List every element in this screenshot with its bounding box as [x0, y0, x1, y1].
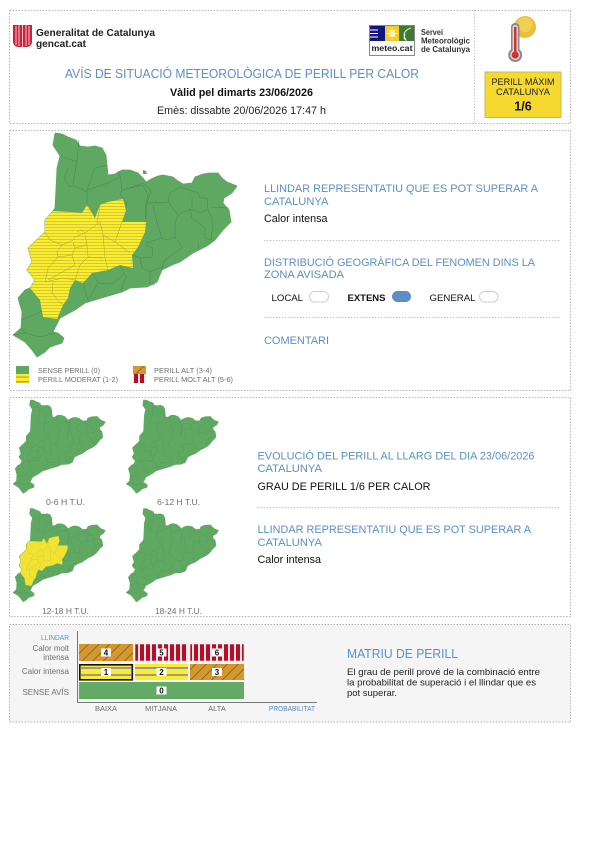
panel: danger matrix [10, 624, 570, 722]
logo text: Servei Meteorològic: de Catalunya [421, 45, 471, 54]
cell 3: 3 [215, 668, 220, 677]
badge: maximum danger: 1/6 [514, 100, 532, 114]
heading: evolution [258, 450, 534, 475]
heading: evolution: CATALUNYA [258, 463, 323, 475]
logo text: Servei Meteorològic: Meteorològic [421, 36, 471, 46]
cell 1 [80, 665, 132, 680]
map: 0-6 h [13, 400, 105, 493]
map: Catalonia danger map [13, 133, 237, 357]
chart: risk matrix [22, 631, 317, 713]
badge: maximum danger: CATALUNYA [496, 87, 551, 98]
logo text: Generalitat: Generalitat de Catalunya [36, 27, 155, 39]
label: 12-18 h: 12-18 H T.U. [42, 606, 89, 616]
cell 0 [79, 682, 244, 699]
cell 4 [79, 644, 133, 661]
matrix explanation: la probabilitat de superació i el llindar que es [347, 678, 536, 688]
danger degree: GRAU DE PERILL 1/6 PER CALOR [258, 481, 431, 493]
panel: main map and details [10, 130, 570, 390]
map legend: PERILL ALT (3-4) [154, 366, 212, 375]
distribution selector: EXTENS [348, 293, 386, 304]
cell 6 [190, 644, 244, 661]
heading: threshold: LLINDAR REPRESENTATIU QUE ES POT SUPERAR A [258, 524, 532, 536]
logo: meteo.cat [370, 26, 414, 56]
label: 6-12 h: 6-12 H T.U. [157, 497, 200, 507]
badge: maximum danger [485, 72, 561, 118]
panel: daily evolution [10, 398, 570, 616]
map: 18-24 h [126, 508, 218, 602]
map legend: SENSE PERILL (0) [38, 366, 100, 375]
row labels: SENSE AVÍS [22, 688, 69, 697]
row labels: Calor molt [33, 644, 70, 653]
map: 6-12 h [126, 400, 218, 493]
heading: threshold [264, 183, 539, 208]
cell 3 [190, 664, 244, 680]
map legend [16, 366, 233, 384]
cell 5: 5 [159, 648, 164, 658]
heading: matrix: MATRIU DE PERILL [347, 647, 458, 661]
distribution selector: GENERAL [430, 293, 476, 304]
probability labels: MITJANA [145, 704, 177, 713]
distribution selector [272, 291, 498, 304]
logo: meteo.cat: meteo.cat [372, 43, 413, 53]
heading: threshold [258, 524, 532, 549]
title: AVÍS DE SITUACIÓ METEOROLÒGICA DE PERILL PER CALOR [65, 66, 419, 81]
heading: threshold: LLINDAR REPRESENTATIU QUE ES POT SUPERAR A [264, 183, 539, 195]
label: 0-6 h: 0-6 H T.U. [46, 497, 85, 507]
map legend: PERILL MOLT ALT (5-6) [154, 375, 233, 384]
heading: geographic distribution: ZONA AVISADA [264, 269, 345, 281]
axis label: probability: PROBABILITAT [269, 704, 315, 713]
logo text: Generalitat: gencat.cat [36, 38, 86, 50]
matrix explanation [347, 667, 540, 699]
icon: Generalitat shield [13, 25, 32, 47]
heading: geographic distribution: DISTRIBUCIÓ GEOGRÀFICA DEL FENOMEN DINS LA [264, 256, 536, 269]
probability labels: BAIXA [95, 704, 117, 713]
cell 6: 6 [215, 648, 220, 658]
axis label: threshold: LLINDAR [41, 633, 70, 642]
probability labels [95, 704, 226, 713]
cell 5 [135, 644, 188, 661]
issue date: Emès: dissabte 20/06/2026 17:47 h [157, 105, 326, 117]
logo text: Generalitat [36, 27, 155, 50]
matrix explanation: El grau de perill prové de la combinació entre [347, 667, 540, 678]
panel: header [10, 10, 570, 124]
heading: threshold: CATALUNYA [264, 196, 329, 208]
matrix explanation: pot superar. [347, 688, 397, 699]
cell 2 [135, 664, 188, 680]
badge: maximum danger: PERILL MÀXIM [492, 77, 555, 88]
heading: evolution: EVOLUCIÓ DEL PERILL AL LLARG DEL DIA 23/06/2026 [258, 450, 534, 462]
row labels [22, 644, 70, 697]
cell 4: 4 [104, 648, 109, 658]
probability labels: ALTA [208, 704, 226, 713]
heading: comment: COMENTARI [264, 335, 329, 347]
row labels: intensa [43, 653, 70, 662]
threshold value: Calor intensa [258, 554, 322, 566]
map legend: PERILL MODERAT (1-2) [38, 375, 118, 384]
cell 0: 0 [159, 686, 164, 696]
row labels: Calor intensa [22, 667, 70, 676]
cell 2: 2 [159, 668, 164, 677]
map: 12-18 h [13, 508, 105, 602]
logo text: Servei Meteorològic: Servei [421, 28, 443, 37]
heading: geographic distribution [264, 256, 536, 281]
validity date: Vàlid pel dimarts 23/06/2026 [170, 87, 313, 99]
threshold value: Calor intensa [264, 213, 328, 225]
heading: threshold: CATALUNYA [258, 537, 323, 549]
icon: thermometer and sun [508, 16, 536, 62]
logo text: Servei Meteorològic [421, 28, 471, 54]
label: 18-24 h: 18-24 H T.U. [155, 606, 202, 616]
distribution selector: LOCAL [272, 293, 303, 304]
cell 1: 1 [104, 668, 109, 677]
